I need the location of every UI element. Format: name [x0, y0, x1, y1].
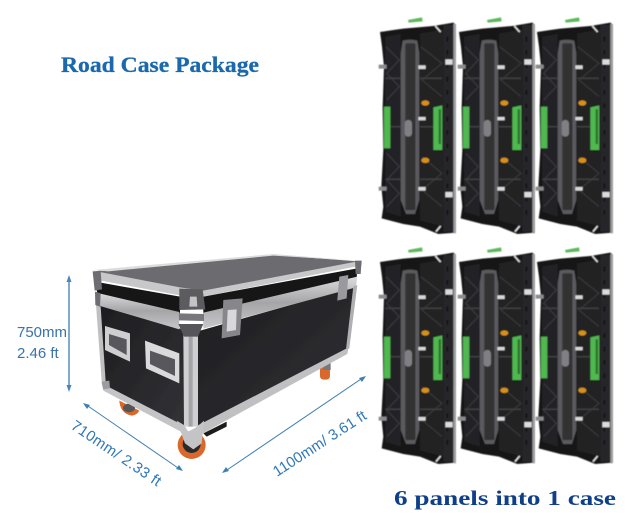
length label: 1100mm/ 3.61 ft — [270, 407, 370, 480]
title: Road Case Package — [61, 52, 259, 77]
panels group: top row — [379, 17, 613, 234]
handle left — [105, 326, 130, 362]
aluminium band — [96, 293, 179, 329]
aluminium edges — [96, 305, 106, 387]
aluminium vertical corner — [183, 332, 198, 427]
wheels — [119, 363, 331, 459]
lid sides — [95, 282, 180, 313]
panel 1 — [379, 17, 456, 234]
panel 6 — [536, 247, 613, 464]
lid rim — [93, 261, 362, 297]
latch rear — [337, 275, 348, 301]
caption: 6 panels into 1 case — [394, 486, 616, 510]
latch front — [222, 298, 243, 338]
handle right — [145, 341, 179, 383]
width label: 710mm/ 2.33 ft — [68, 417, 165, 490]
panel 3 — [536, 17, 613, 234]
body right face — [197, 287, 355, 427]
height arrow — [66, 275, 72, 392]
body left face — [98, 305, 185, 427]
panel 5 — [458, 247, 535, 464]
height label: 750mm — [17, 324, 67, 341]
panel 4 — [379, 247, 456, 464]
panels group: bottom row — [379, 247, 613, 464]
road case — [93, 254, 362, 459]
width arrow — [83, 403, 183, 471]
panel 2 — [458, 17, 535, 234]
lid top — [93, 255, 362, 295]
height label: 2.46 ft — [17, 345, 60, 362]
height label — [17, 324, 67, 362]
corner fittings — [93, 261, 362, 449]
length arrow — [222, 376, 366, 473]
